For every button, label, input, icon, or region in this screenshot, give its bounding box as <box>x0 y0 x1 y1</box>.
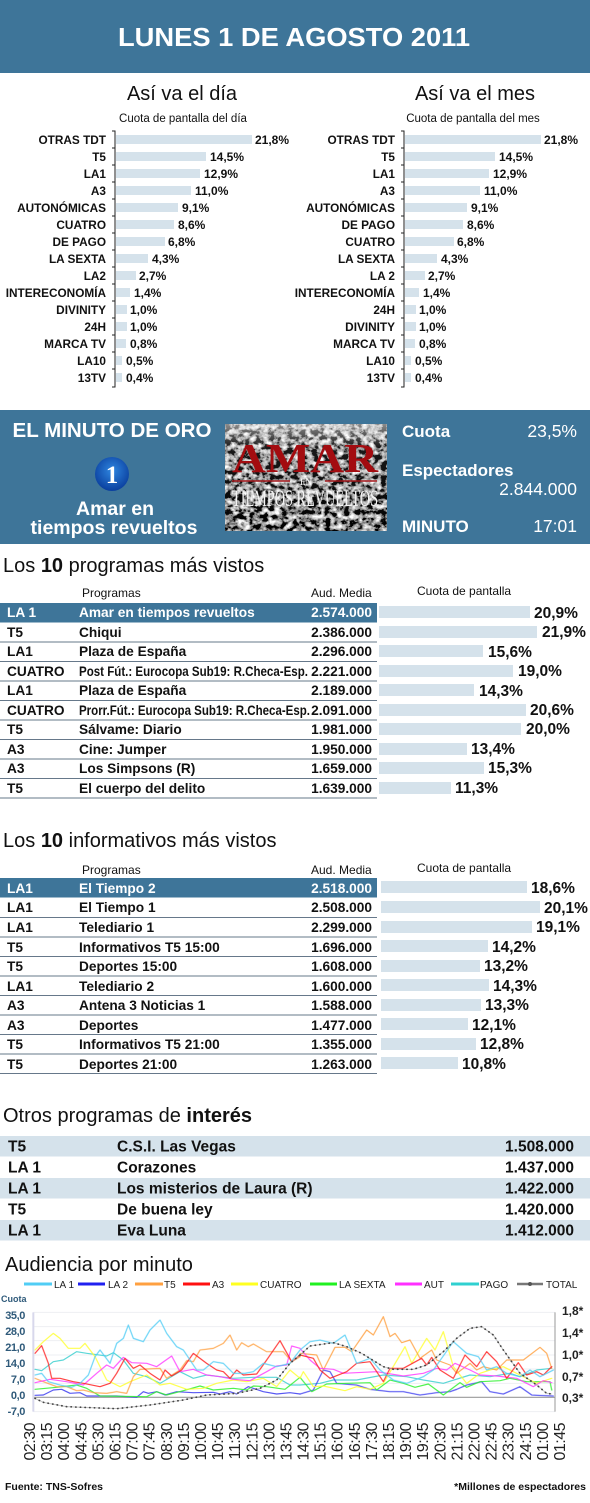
table: los 10 programas más vistos: 2.091.000 <box>311 703 372 718</box>
table: los 10 programas más vistos: 15,3% <box>488 760 532 777</box>
time axis labels: 21:15 <box>449 1422 466 1461</box>
table: los 10 informativos más vistos: Antena 3 Noticias 1 <box>79 998 206 1013</box>
table: los 10 informativos más vistos: 14,2% <box>492 939 536 956</box>
table: los 10 informativos más vistos: 1.355.000 <box>311 1037 372 1052</box>
time axis labels: 13:45 <box>278 1422 296 1461</box>
bar chart: cuota del mes: 24H <box>373 303 395 317</box>
bar chart: cuota del mes: 11,0% <box>484 184 518 198</box>
bar chart: cuota del mes: OTRAS TDT <box>328 133 396 147</box>
bar chart: cuota del mes: 0,4% <box>415 371 443 385</box>
table: los 10 programas más vistos: Sálvame: Diario <box>79 722 182 737</box>
bar chart: cuota del mes: LA SEXTA <box>338 252 395 266</box>
table: los 10 programas más vistos: T5 <box>7 781 23 796</box>
left axis labels <box>1 1294 27 1418</box>
legend: T5 <box>164 1280 176 1291</box>
left axis labels: 7,0 <box>11 1374 25 1386</box>
table: los 10 informativos más vistos: A3 <box>7 998 25 1013</box>
heading: el minuto de oro: EL MINUTO DE ORO <box>12 420 212 442</box>
table: los 10 informativos más vistos: A3 <box>7 1018 25 1033</box>
table: los 10 programas más vistos: 20,6% <box>530 702 574 719</box>
table: otros programas de interés: 1.422.000 <box>505 1180 574 1198</box>
table: los 10 informativos más vistos: T5 <box>7 959 23 974</box>
legend: A3 <box>212 1280 225 1291</box>
bar chart: cuota del día: 0,4% <box>126 371 154 385</box>
table: los 10 programas más vistos: Post Fút.: Eurocopa Sub19: R.Checa-Esp. <box>79 664 308 679</box>
image: Amar en tiempos revueltos: EN <box>300 477 312 487</box>
table: los 10 informativos más vistos: LA1 <box>7 920 33 935</box>
table: los 10 programas más vistos: 2.386.000 <box>311 625 372 640</box>
table: otros programas de interés <box>0 1136 590 1240</box>
bar chart: cuota del mes: MARCA TV <box>333 337 395 351</box>
legend: PAGO <box>480 1280 508 1291</box>
table: los 10 informativos más vistos: Aud. Media <box>311 863 372 877</box>
table: los 10 programas más vistos: Amar en tiempos revueltos <box>79 605 255 620</box>
table: los 10 programas más vistos: Los Simpsons (R) <box>79 761 195 776</box>
table: los 10 informativos más vistos: LA1 <box>7 979 33 994</box>
time axis labels <box>22 1422 569 1461</box>
table: los 10 programas más vistos: 13,4% <box>471 741 515 758</box>
time axis labels: 09:15 <box>176 1422 193 1461</box>
subtitle: cuota del mes: Cuota de pantalla del mes <box>406 113 540 125</box>
legend: LA 1 <box>54 1280 74 1291</box>
bar chart: cuota del día: DIVINITY <box>56 303 106 317</box>
table: los 10 programas más vistos: Prorr.Fút.: Eurocopa Sub19: R.Checa-Esp. <box>79 703 310 718</box>
stat: minuto: 17:01 <box>533 516 577 536</box>
bar chart: cuota del día: LA1 <box>84 167 106 181</box>
table: otros programas de interés: C.S.I. Las Vegas <box>117 1138 236 1156</box>
table: otros programas de interés: LA 1 <box>8 1160 41 1176</box>
bar chart: cuota del mes: 6,8% <box>457 235 485 249</box>
bar chart: cuota del mes: INTERECONOMÍA <box>295 286 395 300</box>
table: otros programas de interés: Eva Luna <box>117 1222 186 1240</box>
table: los 10 informativos más vistos: 1.263.000 <box>311 1057 372 1072</box>
table: los 10 programas más vistos: 14,3% <box>479 683 523 700</box>
table: los 10 informativos más vistos: Informativos T5 15:00 <box>79 940 220 955</box>
image: Amar en tiempos revueltos: AMAR <box>232 435 378 481</box>
series: A3 <box>35 1341 552 1387</box>
time axis labels: 24:15 <box>518 1422 535 1461</box>
time axis labels: 17:30 <box>364 1422 381 1461</box>
program name: Amar en <box>76 498 154 520</box>
time axis labels: 05:30 <box>90 1422 107 1461</box>
time axis labels: 22:00 <box>466 1422 484 1461</box>
table: los 10 programas más vistos: Cine: Jumper <box>79 742 167 757</box>
bar chart: cuota del mes: LA 2 <box>370 269 395 283</box>
right axis labels: 1,8* <box>562 1304 584 1318</box>
legend: TOTAL <box>546 1280 578 1291</box>
table: otros programas de interés: 1.437.000 <box>505 1160 574 1176</box>
heading: otros programas de interés: Otros programas de interés <box>3 1105 252 1127</box>
image: Amar en tiempos revueltos: TIEMPOS REVUELTOS <box>232 486 378 511</box>
table: los 10 programas más vistos: Programas <box>82 586 141 600</box>
table: los 10 programas más vistos: 19,0% <box>518 663 562 680</box>
time axis labels: 04:00 <box>56 1422 73 1461</box>
bar chart: cuota del mes: LA10 <box>366 354 395 368</box>
bar chart: cuota del día: 9,1% <box>182 201 210 215</box>
table: los 10 informativos más vistos: 19,1% <box>536 919 580 936</box>
time axis labels: 08:30 <box>159 1422 176 1461</box>
left axis labels: Cuota <box>1 1294 27 1304</box>
table: los 10 informativos más vistos: Telediario 1 <box>79 920 154 935</box>
table: los 10 programas más vistos: 15,6% <box>488 644 532 661</box>
right axis labels: 0,3* <box>562 1391 584 1405</box>
table: los 10 informativos más vistos: 13,3% <box>485 997 529 1014</box>
table: otros programas de interés: 1.508.000 <box>505 1138 574 1156</box>
table: los 10 informativos más vistos: Deportes 21:00 <box>79 1057 178 1072</box>
series: CUATRO <box>35 1332 552 1391</box>
table: otros programas de interés: 1.412.000 <box>505 1222 574 1240</box>
bar chart: cuota del mes: DIVINITY <box>345 320 395 334</box>
bar chart: cuota del día: A3 <box>91 184 106 198</box>
plot area <box>33 1312 555 1412</box>
bar chart: cuota del día: MARCA TV <box>44 337 106 351</box>
bar chart: cuota del día: 6,8% <box>168 235 196 249</box>
table: los 10 programas más vistos: Cuota de pantalla <box>417 584 511 598</box>
heading: los 10 informativos más vistos: Los 10 informativos más vistos <box>3 830 276 852</box>
time axis labels: 13:00 <box>261 1422 278 1461</box>
left axis labels: 14,0 <box>5 1358 25 1370</box>
stat: espectadores <box>402 461 577 499</box>
bar chart: cuota del día: 14,5% <box>210 150 244 164</box>
bar chart: cuota del día: 4,3% <box>152 252 180 266</box>
panel: el minuto de oro <box>0 410 590 544</box>
left axis labels: 0,0 <box>11 1390 25 1402</box>
table: los 10 informativos más vistos: 2.299.000 <box>311 920 372 935</box>
source note: Fuente: TNS-Sofres <box>5 1481 103 1493</box>
table: los 10 informativos más vistos: T5 <box>7 940 23 955</box>
time axis labels: 10:45 <box>210 1422 227 1461</box>
table: los 10 programas más vistos: Chiqui <box>79 625 122 640</box>
table: los 10 informativos más vistos: 1.696.000 <box>311 940 372 955</box>
legend: LA 2 <box>108 1280 128 1291</box>
bar chart: cuota del mes: DE PAGO <box>341 218 395 232</box>
bar chart: cuota del día: 2,7% <box>139 269 167 283</box>
time axis labels: 04:45 <box>73 1422 90 1461</box>
time axis labels: 02:30 <box>22 1422 39 1461</box>
bar chart: cuota del mes: T5 <box>381 150 395 164</box>
table: los 10 informativos más vistos: Programas <box>82 863 141 877</box>
panel: así va el día <box>6 83 289 387</box>
bar chart: cuota del mes: AUTONÓMICAS <box>306 201 395 215</box>
table: los 10 programas más vistos: Plaza de España <box>79 683 187 698</box>
right axis labels <box>562 1304 584 1405</box>
table: los 10 informativos más vistos: 2.518.000 <box>311 881 372 896</box>
bar chart: cuota del mes: 14,5% <box>499 150 533 164</box>
table: los 10 informativos más vistos: Deportes <box>79 1018 139 1033</box>
right axis labels: 1,4* <box>562 1326 584 1340</box>
table: los 10 programas más vistos: CUATRO <box>7 664 65 679</box>
bar chart: cuota del día: 21,8% <box>255 133 289 147</box>
legend: LA SEXTA <box>339 1280 386 1291</box>
time axis labels: 19:45 <box>415 1422 432 1461</box>
time axis labels: 06:15 <box>108 1422 124 1461</box>
table: los 10 informativos más vistos: 13,2% <box>484 958 528 975</box>
bar chart: cuota del mes: 9,1% <box>471 201 499 215</box>
bar chart: cuota del día: AUTONÓMICAS <box>17 201 106 215</box>
table: los 10 informativos más vistos: 18,6% <box>531 880 575 897</box>
table: los 10 programas más vistos: 1.659.000 <box>311 761 372 776</box>
table: otros programas de interés: LA 1 <box>8 1180 41 1198</box>
series: T5 <box>35 1317 552 1393</box>
bar chart: cuota del día: INTERECONOMÍA <box>6 286 106 300</box>
table: los 10 informativos más vistos: 1.588.000 <box>311 998 372 1013</box>
legend <box>24 1280 578 1291</box>
table: los 10 informativos más vistos: Informativos T5 21:00 <box>79 1037 220 1052</box>
icon: logo La 1 <box>95 457 129 491</box>
table: los 10 programas más vistos: 1.981.000 <box>311 722 372 737</box>
table: los 10 informativos más vistos: El Tiempo 1 <box>79 900 156 915</box>
heading: los 10 programas más vistos: Los 10 programas más vistos <box>3 555 264 577</box>
table: los 10 informativos más vistos: 14,3% <box>493 978 537 995</box>
table: los 10 informativos más vistos: 12,8% <box>480 1036 524 1053</box>
table: los 10 informativos más vistos: 1.600.000 <box>311 979 372 994</box>
table: los 10 programas más vistos: 2.221.000 <box>311 664 372 679</box>
table: los 10 programas más vistos <box>0 584 586 798</box>
table: los 10 programas más vistos: T5 <box>7 722 23 737</box>
table: los 10 programas más vistos: Plaza de España <box>79 644 187 659</box>
time axis labels: 01:45 <box>552 1422 569 1461</box>
right axis labels: 0,7* <box>562 1370 584 1384</box>
table: los 10 informativos más vistos: 1.477.000 <box>311 1018 372 1033</box>
table: otros programas de interés: Corazones <box>117 1160 196 1176</box>
table: los 10 informativos más vistos: LA1 <box>7 881 33 896</box>
stat: espectadores: Espectadores <box>402 461 514 480</box>
time axis labels: 15:15 <box>313 1422 330 1461</box>
bar chart: cuota del mes: 8,6% <box>467 218 495 232</box>
table: otros programas de interés: Los misterios de Laura (R) <box>117 1180 313 1198</box>
table: los 10 programas más vistos: LA1 <box>7 644 33 659</box>
table: los 10 informativos más vistos: 12,1% <box>472 1017 516 1034</box>
time axis labels: 22:45 <box>484 1422 501 1461</box>
bar chart: cuota del día: 1,4% <box>134 286 162 300</box>
table: los 10 informativos más vistos: Cuota de pantalla <box>417 861 511 875</box>
left axis labels: -7,0 <box>8 1406 25 1418</box>
series: TOTAL <box>35 1327 552 1409</box>
heading: audiencia por minuto: Audiencia por minuto <box>5 1254 193 1276</box>
line chart: audiencia por minuto <box>1 1294 584 1461</box>
bar chart: cuota del mes: CUATRO <box>345 235 395 249</box>
time axis labels: 01:00 <box>535 1422 552 1461</box>
time axis labels: 19:00 <box>398 1422 415 1461</box>
time axis labels: 03:15 <box>39 1422 56 1461</box>
table: los 10 informativos más vistos: Deportes 15:00 <box>79 959 178 974</box>
bar chart: cuota del mes: 4,3% <box>441 252 469 266</box>
table: los 10 programas más vistos: 2.574.000 <box>311 605 372 620</box>
bar chart: cuota del mes: LA1 <box>373 167 395 181</box>
left axis labels: 28,0 <box>5 1326 25 1338</box>
time axis labels: 23:30 <box>501 1422 518 1461</box>
bar chart: cuota del mes: 21,8% <box>544 133 578 147</box>
table: otros programas de interés: De buena ley <box>117 1202 213 1218</box>
time axis labels: 16:45 <box>347 1422 364 1461</box>
bar chart: cuota del día: 12,9% <box>204 167 238 181</box>
time axis labels: 11:30 <box>227 1422 244 1459</box>
table: otros programas de interés: 1.420.000 <box>505 1202 574 1218</box>
series: PAGO <box>35 1352 552 1385</box>
time axis labels: 07:45 <box>142 1422 159 1461</box>
stat: minuto <box>402 516 577 536</box>
table: los 10 informativos más vistos: 10,8% <box>462 1056 506 1073</box>
image: Amar en tiempos revueltos <box>225 424 387 531</box>
table: los 10 programas más vistos: 1.950.000 <box>311 742 372 757</box>
stat: espectadores: 2.844.000 <box>499 479 577 499</box>
heading: así va el día: Así va el día <box>127 83 238 105</box>
bar chart: cuota del día: 1,0% <box>130 320 158 334</box>
bar chart: cuota del mes: 0,5% <box>415 354 443 368</box>
time axis labels: 18:15 <box>381 1422 398 1461</box>
series: LA 2 <box>35 1370 553 1397</box>
bar chart: cuota del día: 11,0% <box>195 184 229 198</box>
right axis labels: 1,0* <box>562 1348 584 1362</box>
bar chart: cuota del mes: 12,9% <box>493 167 527 181</box>
heading: así va el mes: Así va el mes <box>415 83 535 105</box>
panel: así va el mes <box>295 83 578 387</box>
bar chart: cuota del día: OTRAS TDT <box>38 133 107 147</box>
table: los 10 programas más vistos: CUATRO <box>7 703 65 718</box>
table: los 10 informativos más vistos: 2.508.000 <box>311 900 372 915</box>
table: los 10 informativos más vistos: El Tiempo 2 <box>79 881 156 896</box>
table: los 10 informativos más vistos: T5 <box>7 1037 23 1052</box>
series: AUT <box>35 1346 552 1387</box>
footnote: millones de espectadores: *Millones de espectadores <box>454 1481 586 1493</box>
table: los 10 programas más vistos: 20,0% <box>526 721 570 738</box>
bar chart: cuota del mes: A3 <box>380 184 395 198</box>
bar chart: cuota del mes: 0,8% <box>419 337 447 351</box>
table: los 10 programas más vistos: 11,3% <box>455 780 498 797</box>
bar chart: cuota del mes: 1,4% <box>423 286 451 300</box>
table: los 10 programas más vistos: 21,9% <box>542 624 586 641</box>
left axis labels: 21,0 <box>5 1342 25 1354</box>
table: otros programas de interés: LA 1 <box>8 1222 41 1240</box>
table: los 10 informativos más vistos: Telediario 2 <box>79 979 154 994</box>
bar chart: cuota del mes: 1,0% <box>419 320 447 334</box>
time axis labels: 16:00 <box>330 1422 347 1461</box>
bar chart: cuota del día: 0,8% <box>130 337 158 351</box>
table: los 10 programas más vistos: A3 <box>7 742 25 757</box>
table: los 10 programas más vistos: El cuerpo del delito <box>79 781 205 796</box>
bar chart: cuota del día: 1,0% <box>130 303 158 317</box>
bar chart: cuota del mes: 1,0% <box>419 303 447 317</box>
table: los 10 programas más vistos: A3 <box>7 761 25 776</box>
table: los 10 programas más vistos: 20,9% <box>534 605 578 622</box>
bar chart: cuota del mes: 2,7% <box>428 269 456 283</box>
time axis labels: 14:30 <box>296 1422 313 1461</box>
table: los 10 programas más vistos: 2.189.000 <box>311 683 372 698</box>
table: los 10 programas más vistos: 1.639.000 <box>311 781 372 796</box>
legend: AUT <box>424 1280 444 1291</box>
legend: CUATRO <box>260 1280 302 1291</box>
stat: cuota: 23,5% <box>527 421 577 441</box>
table: los 10 informativos más vistos <box>0 861 588 1074</box>
bar chart: cuota del día: CUATRO <box>56 218 106 232</box>
table: los 10 programas más vistos: 2.296.000 <box>311 644 372 659</box>
left axis labels: 35,0 <box>5 1310 25 1322</box>
bar chart: cuota del día: LA10 <box>77 354 106 368</box>
table: los 10 informativos más vistos: LA1 <box>7 900 33 915</box>
table: los 10 programas más vistos: Aud. Media <box>311 586 372 600</box>
program name: tiempos revueltos <box>31 517 198 539</box>
bar chart: cuota del día: 0,5% <box>126 354 154 368</box>
bar chart: cuota del mes: 13TV <box>367 371 395 385</box>
table: los 10 informativos más vistos: 1.608.000 <box>311 959 372 974</box>
bar chart: cuota del día: T5 <box>92 150 106 164</box>
bar chart: cuota del día: LA SEXTA <box>49 252 106 266</box>
stat: cuota <box>402 421 577 441</box>
series: LA SEXTA <box>35 1377 552 1397</box>
title banner <box>0 0 590 73</box>
time axis labels: 20:30 <box>432 1422 449 1461</box>
title banner: LUNES 1 DE AGOSTO 2011 <box>118 22 470 52</box>
table: los 10 programas más vistos: T5 <box>7 625 23 640</box>
table: los 10 informativos más vistos: 20,1% <box>544 900 588 917</box>
series: LA 1 <box>35 1320 553 1387</box>
bar chart: cuota del día: DE PAGO <box>52 235 106 249</box>
bar chart: cuota del día <box>6 131 289 387</box>
table: los 10 programas más vistos: LA1 <box>7 683 33 698</box>
time axis labels: 12:15 <box>244 1422 261 1461</box>
bar chart: cuota del día: 8,6% <box>178 218 206 232</box>
bar chart: cuota del día: LA2 <box>84 269 106 283</box>
table: otros programas de interés: T5 <box>8 1138 26 1156</box>
subtitle: cuota del día: Cuota de pantalla del día <box>119 113 248 125</box>
table: otros programas de interés: T5 <box>8 1202 26 1218</box>
stat: cuota: Cuota <box>402 422 451 441</box>
time axis labels: 10:00 <box>193 1422 210 1461</box>
time axis labels: 07:00 <box>125 1422 142 1461</box>
bar chart: cuota del día: 13TV <box>78 371 106 385</box>
table: los 10 programas más vistos: LA 1 <box>7 605 37 620</box>
icon: logo La 1: 1 <box>106 462 118 489</box>
table: los 10 informativos más vistos: T5 <box>7 1057 23 1072</box>
stat: minuto: MINUTO <box>402 517 469 536</box>
bar chart: cuota del día: 24H <box>84 320 106 334</box>
bar chart: cuota del mes <box>295 131 578 387</box>
